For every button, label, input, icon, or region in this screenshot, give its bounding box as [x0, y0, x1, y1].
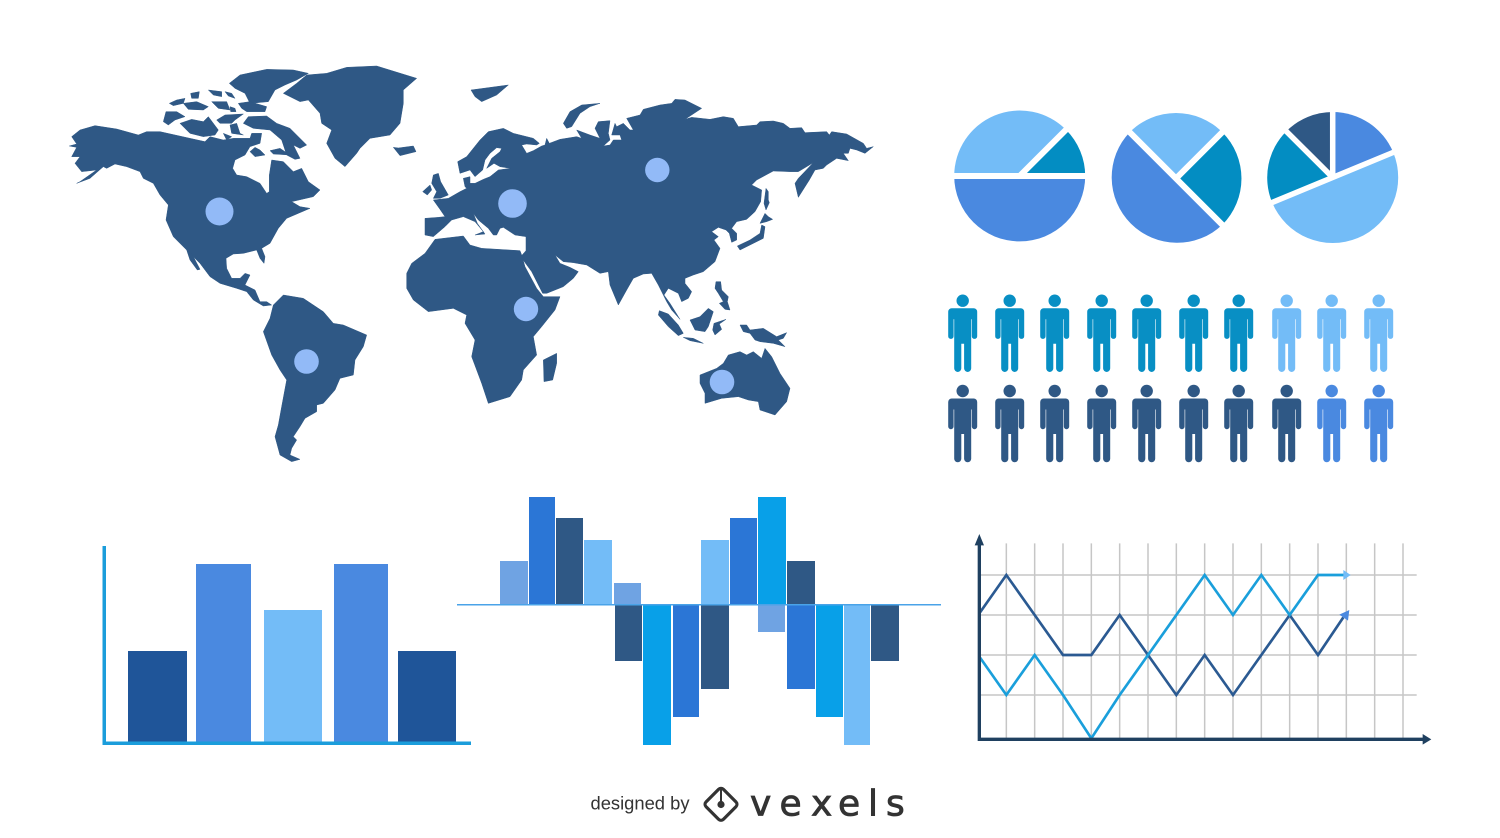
map markers	[206, 158, 734, 394]
Madagascar	[543, 353, 557, 382]
diverging bar chart	[457, 497, 941, 745]
map: Eurasia, Africa, Oceania	[407, 85, 873, 415]
New Guinea	[740, 325, 787, 347]
Baffin Island	[243, 116, 307, 159]
Novaya Zemlya	[563, 103, 600, 128]
South America	[263, 295, 367, 462]
map: Americas and Arctic	[69, 66, 417, 462]
Svalbard	[471, 85, 508, 102]
logo wordmark: vexels	[750, 784, 905, 824]
Eurasia	[425, 99, 873, 319]
pie chart 1	[950, 111, 1090, 241]
pie chart 2	[1112, 113, 1241, 243]
Greenland	[283, 66, 417, 167]
North America	[69, 126, 320, 306]
credit text: designed by	[590, 794, 690, 814]
bar chart	[102, 546, 471, 745]
line chart	[975, 534, 1431, 745]
British Isles	[423, 173, 448, 198]
pie chart 3	[1266, 108, 1399, 243]
Southeast Asian islands	[658, 282, 730, 343]
series: navy line	[979, 575, 1349, 695]
Iceland	[393, 146, 416, 156]
series: light blue line	[979, 570, 1351, 738]
axes	[975, 534, 1431, 745]
pictogram: bottom row of people	[948, 385, 1393, 462]
logo icon	[704, 787, 738, 822]
pictogram: top row of people	[948, 294, 1393, 372]
Baja California	[187, 250, 200, 270]
world map	[69, 66, 873, 462]
Sakhalin and Japan	[737, 188, 773, 250]
credit line	[590, 784, 905, 824]
Ellesmere Island	[229, 69, 308, 103]
Africa	[407, 236, 560, 403]
Arctic islands	[163, 90, 290, 157]
Australia	[700, 348, 790, 415]
